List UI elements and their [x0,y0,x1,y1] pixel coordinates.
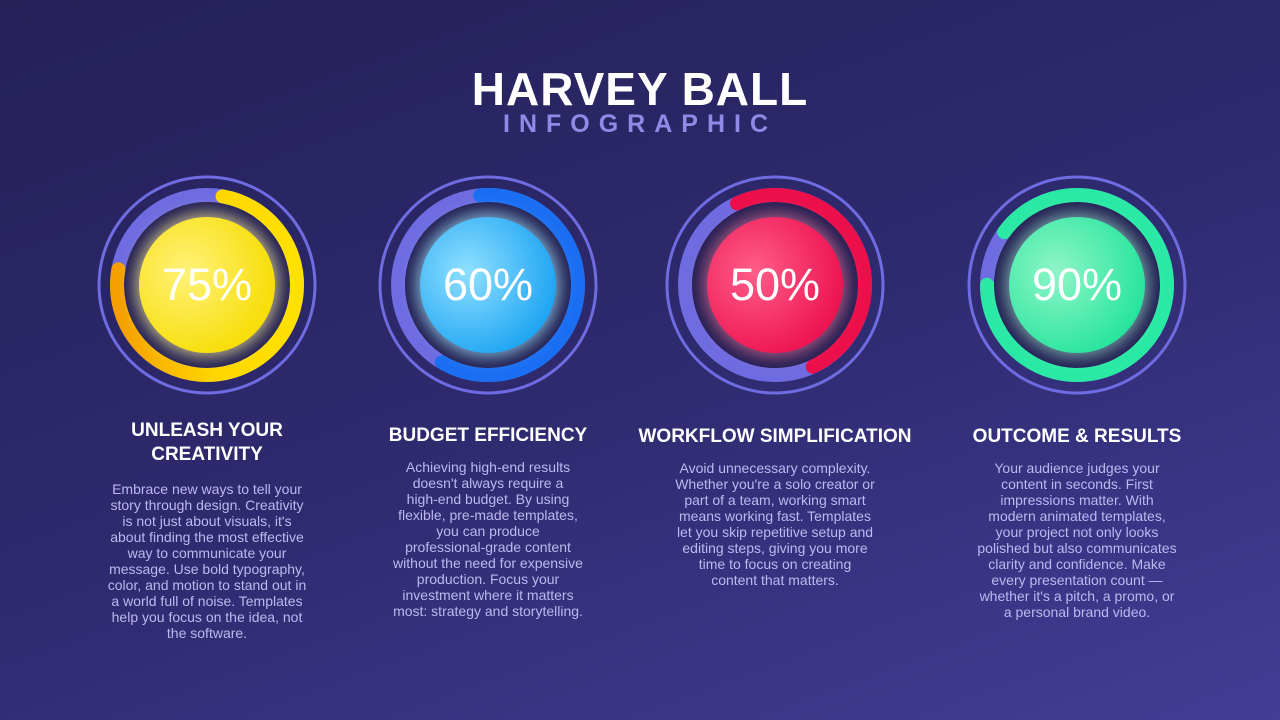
subtitle: INFOGRAPHIC [503,110,777,138]
ring: 75% [98,176,316,394]
text block: message. Use bold typography, [109,561,305,577]
panel: creativity [108,420,306,641]
text block: color, and motion to stand out in [108,577,306,593]
heading: WORKFLOW SIMPLIFICATION [638,426,912,447]
text block [675,460,875,588]
heading: OUTCOME & RESULTS [973,426,1181,447]
text block: about finding the most effective [110,529,304,545]
ring: 60% [378,176,598,394]
text block: story through design. Creativity [110,497,303,513]
text block: help you focus on the idea, not [112,609,302,625]
text block [108,481,306,641]
text block: high-end budget. By using [407,491,569,507]
text block: polished but also communicates [977,540,1177,556]
ring: 75%: 75% [162,259,252,310]
text block: your project not only looks [996,524,1158,540]
ring: 90%: 90% [1032,259,1122,310]
heading [131,420,283,465]
panel: budget [389,425,587,619]
text block: clarity and confidence. Make [988,556,1166,572]
text block: investment where it matters [402,587,574,603]
text block: content that matters. [711,572,839,588]
text block: editing steps, giving you more [682,540,868,556]
panel: outcome [973,426,1181,620]
ring: 50%: 50% [730,259,820,310]
text block: Your audience judges your [994,460,1160,476]
text block: a world full of noise. Templates [111,593,303,609]
text block: Achieving high-end results [406,459,570,475]
text block: time to focus on creating [699,556,851,572]
text block: a personal brand video. [1004,604,1150,620]
text block: let you skip repetitive setup and [677,524,873,540]
text block: you can produce [436,523,540,539]
text block: flexible, pre-made templates, [398,507,578,523]
text block: content in seconds. First [1001,476,1153,492]
text block: modern animated templates, [988,508,1166,524]
text block: way to communicate your [128,545,286,561]
text block: most: strategy and storytelling. [393,603,583,619]
text block: part of a team, working smart [684,492,866,508]
text block: Whether you're a solo creator or [675,476,875,492]
heading: UNLEASH YOUR [131,420,283,441]
text block: production. Focus your [417,571,559,587]
text block: means working fast. Templates [679,508,871,524]
text block: without the need for expensive [393,555,583,571]
text block: the software. [167,625,247,641]
text block: professional-grade content [405,539,571,555]
text block: is not just about visuals, it's [122,513,292,529]
heading: CREATIVITY [151,444,263,465]
text block: every presentation count — [991,572,1163,588]
text block: doesn't always require a [413,475,563,491]
ring: 60%: 60% [443,259,533,310]
text block: Avoid unnecessary complexity. [680,460,870,476]
text block: whether it's a pitch, a promo, or [980,588,1174,604]
heading: BUDGET EFFICIENCY [389,425,587,446]
ring: 90% [968,176,1186,394]
title: HARVEY BALL [472,63,808,115]
text block: impressions matter. With [1000,492,1154,508]
text block [393,459,583,619]
ring: 50% [666,176,884,394]
text block: Embrace new ways to tell your [112,481,302,497]
panel: workflow [638,426,912,588]
text block [977,460,1177,620]
